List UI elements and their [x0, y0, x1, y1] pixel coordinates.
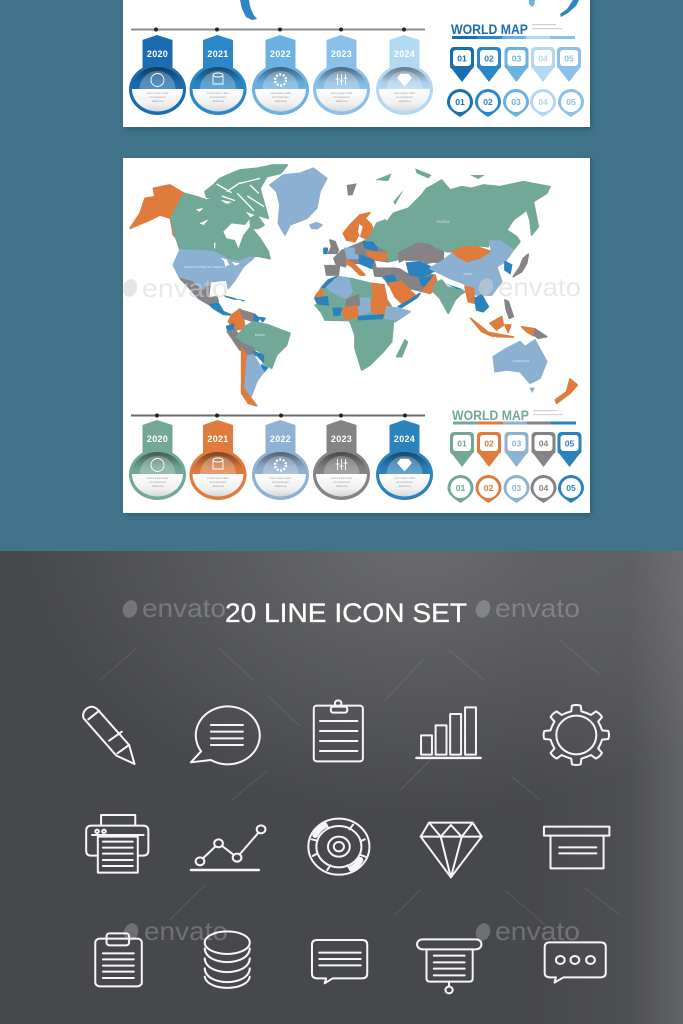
Mauritania — [328, 292, 345, 308]
badge 2022: 2022 — [270, 434, 291, 444]
Japan — [513, 254, 528, 277]
Alaska panhandle — [171, 220, 177, 238]
Alaska — [130, 185, 184, 228]
badge 2024: adipiscing — [399, 484, 411, 488]
China — [430, 241, 513, 295]
icon: clipboard — [314, 700, 363, 761]
Hudson Bay — [223, 219, 250, 248]
icon: diamond — [421, 823, 482, 877]
round pin 05: 05 — [566, 483, 576, 493]
Morocco — [322, 277, 337, 287]
badge 2022 — [252, 35, 309, 115]
badge 2024 — [376, 420, 433, 500]
Sweden gulf — [358, 224, 363, 237]
Scandinavia — [343, 213, 373, 242]
badge 2021: Lorem ipsum dolor — [207, 476, 229, 480]
badge 2022: Lorem ipsum dolor — [270, 91, 291, 95]
Russia — [370, 180, 550, 262]
icon: bar chart — [416, 707, 481, 758]
round pin 02: 02 — [484, 483, 493, 493]
label: Australia: AUSTRALIA — [513, 359, 529, 363]
label: Russia: RUSSIA — [436, 220, 450, 224]
round pin 03: 03 — [512, 483, 521, 493]
heading: world map: WORLD MAP — [452, 408, 529, 423]
Chile — [242, 348, 257, 406]
badge 2020 — [129, 420, 186, 500]
badge 2024: Lorem ipsum dolor — [394, 91, 415, 95]
square pin 04: 04 — [539, 438, 548, 448]
Black Sea — [375, 261, 390, 268]
legend: top card — [447, 22, 584, 117]
world map: Asia, southern Africa and Oceania — [347, 168, 577, 403]
badge 2023: sit consectetur — [333, 480, 350, 484]
title: 20 LINE ICON SET — [225, 598, 467, 628]
Ghana — [333, 308, 342, 315]
badge 2023: adipiscing — [336, 484, 348, 488]
label: Brazil: BRAZIL — [255, 333, 266, 337]
Caspian Sea — [398, 260, 408, 273]
timeline dots — [154, 28, 406, 32]
Australia — [493, 340, 547, 383]
Arctic channels — [217, 178, 264, 211]
Southern Africa — [350, 320, 393, 370]
label: USA: UNITED STATES OF AMERICA — [184, 265, 226, 269]
Kazakhstan east — [398, 243, 443, 263]
Yemen — [398, 293, 420, 307]
Ireland — [324, 248, 327, 253]
square pin 04: 04 — [538, 54, 548, 64]
square pin 02: 02 — [484, 438, 494, 448]
badge 2023: sit consectetur — [333, 95, 350, 99]
round pin 03: 03 — [511, 97, 521, 107]
Russia west — [363, 213, 443, 262]
watermark: map right: envato — [498, 272, 581, 302]
panel: icon set — [0, 551, 683, 1024]
badge 2022: adipiscing — [275, 99, 287, 103]
round pin 01: 01 — [455, 97, 465, 107]
badge 2022: Lorem ipsum dolor — [270, 476, 291, 480]
badge 2022: sit consectetur — [272, 480, 289, 484]
Saudi Arabia — [388, 282, 417, 303]
legend colour bar — [452, 36, 575, 39]
square pin 03: 03 — [512, 438, 521, 448]
round pin 04: 04 — [538, 97, 548, 107]
Algeria — [327, 277, 353, 298]
icon: printer — [86, 815, 148, 873]
New Zealand — [555, 379, 577, 403]
Greenland — [270, 168, 327, 235]
Western Sahara — [315, 288, 323, 297]
square pin 02: 02 — [484, 54, 494, 64]
India — [433, 280, 465, 313]
Nigeria — [343, 306, 358, 319]
Europe landmass — [334, 242, 388, 268]
Mexico — [181, 279, 218, 305]
panel: main map card — [123, 158, 592, 516]
legend note — [533, 410, 563, 415]
icon: speech bubble — [191, 706, 260, 764]
badge 2023: adipiscing — [336, 99, 348, 103]
Arctic archipelago — [205, 165, 287, 218]
Venezuela — [240, 310, 255, 322]
Myanmar — [465, 287, 475, 303]
country labels — [184, 220, 529, 363]
badge 2022: adipiscing — [275, 484, 287, 488]
timeline line — [131, 28, 425, 30]
badge 2020 — [129, 35, 186, 115]
Africa landmass — [315, 277, 410, 322]
heading: world map: WORLD MAP — [451, 22, 528, 37]
badge 2024: sit consectetur — [396, 95, 413, 99]
Papua — [534, 329, 547, 338]
badge 2021: adipiscing — [212, 484, 224, 488]
icons: middle row — [86, 815, 609, 877]
Bangladesh and Nepal — [445, 283, 465, 290]
map fragment: South America tip — [240, 0, 257, 20]
Iceland — [310, 223, 322, 229]
icons: bottom row — [95, 931, 606, 993]
Sudan and Egypt — [369, 283, 395, 318]
Mongolia — [452, 247, 492, 263]
Canadian lakes — [196, 208, 215, 248]
West Africa — [315, 305, 342, 317]
badge 2020: 2020 — [147, 49, 168, 59]
badge 2022: sit consectetur — [272, 95, 289, 99]
Iraq — [385, 275, 398, 285]
watermark: icon panel bottom right: envato — [495, 916, 580, 946]
Caribbean — [223, 295, 245, 302]
round pin 04: 04 — [539, 483, 548, 493]
square pin 05: 05 — [565, 438, 574, 448]
Iran — [395, 275, 423, 288]
label: China: CHINA — [463, 272, 473, 276]
badge 2021 — [190, 35, 246, 115]
Balkans — [359, 255, 373, 268]
badge 2020: adipiscing — [152, 99, 164, 103]
badge 2020: 2020 — [147, 434, 168, 444]
badge 2021 — [190, 420, 246, 500]
icon: coin stack — [205, 931, 250, 988]
badge 2023 — [313, 35, 370, 115]
round pin 02: 02 — [483, 97, 493, 107]
Svalbard — [347, 183, 357, 196]
badge 2020: Lorem ipsum dolor — [147, 476, 168, 480]
Argentina — [243, 355, 263, 403]
map fragment: New Zealand — [560, 0, 579, 17]
badge 2024: 2024 — [394, 434, 415, 444]
badge 2020: sit consectetur — [149, 480, 166, 484]
badge 2021: adipiscing — [212, 99, 224, 103]
Spain — [325, 266, 339, 275]
icon: presentation board — [417, 939, 481, 993]
badge 2022 — [252, 420, 309, 500]
Pakistan — [423, 275, 438, 293]
icon: message — [312, 940, 367, 983]
Philippines — [505, 300, 513, 318]
Niger — [345, 295, 359, 307]
Central Africa band — [359, 315, 383, 322]
Baltics — [363, 242, 377, 251]
USA — [173, 250, 253, 292]
icons: top row — [83, 700, 609, 765]
badge 2021: Lorem ipsum dolor — [207, 91, 229, 95]
Paraguay — [253, 352, 263, 362]
badge 2021: sit consectetur — [210, 95, 226, 99]
Colombia — [228, 309, 245, 330]
timeline dots — [155, 414, 407, 418]
Central Asia — [405, 262, 437, 277]
badge 2021: sit consectetur — [210, 480, 226, 484]
Indonesia — [471, 317, 535, 337]
Italy — [346, 260, 365, 275]
Germany — [345, 248, 360, 258]
badge 2021: 2021 — [207, 434, 229, 444]
Kamchatka — [527, 202, 538, 235]
Ethiopia — [385, 307, 410, 320]
Libya — [350, 278, 373, 298]
badge 2024: 2024 — [394, 49, 415, 59]
badge 2023: Lorem ipsum dolor — [331, 91, 352, 95]
icon: poker chip — [308, 819, 369, 875]
France — [334, 250, 347, 267]
Brazil — [237, 322, 290, 368]
icon: line chart — [191, 825, 265, 870]
badge 2022: 2022 — [270, 49, 291, 59]
badge 2023: 2023 — [331, 434, 352, 444]
icon: notepad — [95, 933, 142, 986]
round pin 01: 01 — [456, 483, 465, 493]
badge 2020: sit consectetur — [149, 95, 166, 99]
Red Sea — [385, 284, 397, 306]
Peru — [227, 330, 247, 352]
icon: archive box — [544, 827, 609, 868]
Madagascar — [397, 340, 407, 357]
badge 2024 — [376, 35, 433, 115]
Uruguay — [262, 365, 267, 372]
icon: chat dots — [545, 942, 606, 983]
badge 2021: 2021 — [207, 49, 229, 59]
Mali — [315, 297, 332, 305]
timeline: main card — [129, 414, 433, 500]
badge 2024: Lorem ipsum dolor — [394, 476, 415, 480]
Middle East landmass — [375, 268, 438, 292]
world map: Europe, Middle East and North Africa — [310, 213, 443, 322]
Bolivia — [242, 343, 257, 358]
Turkey — [373, 268, 395, 277]
Kazakhstan — [398, 243, 443, 263]
timeline: top card — [129, 28, 433, 115]
square pin 03: 03 — [512, 54, 521, 64]
Arctic islands — [375, 168, 485, 205]
Canada mainland — [171, 193, 270, 261]
map fragment: Tasmania — [529, 0, 535, 7]
square pin 01: 01 — [457, 54, 467, 64]
icon: pencil — [83, 707, 135, 764]
Ukraine — [367, 252, 388, 260]
square pin 01: 01 — [457, 438, 467, 448]
watermark: icon panel bottom left: envato — [144, 916, 228, 946]
Central America — [210, 303, 232, 315]
badge 2023: Lorem ipsum dolor — [331, 476, 352, 480]
Korea — [505, 262, 512, 273]
timeline line — [131, 414, 425, 416]
legend: main card — [448, 408, 584, 503]
legend note — [532, 24, 562, 29]
Poland — [356, 247, 367, 253]
Indochina — [475, 295, 488, 312]
Great Lakes — [221, 258, 240, 267]
legend colour bar — [453, 422, 576, 424]
watermark: icon panel top left: envato — [142, 593, 226, 623]
badge 2024: adipiscing — [399, 99, 411, 103]
badge 2020: adipiscing — [152, 484, 164, 488]
icon: gear — [544, 705, 609, 765]
watermark: icon panel top right: envato — [495, 593, 580, 623]
panel: top map card — [123, 0, 592, 130]
world map: North America north — [130, 165, 327, 406]
Guyanas — [254, 315, 265, 322]
square pin 05: 05 — [564, 54, 574, 64]
Chad — [357, 298, 370, 315]
badge 2024: sit consectetur — [396, 480, 413, 484]
Ecuador — [227, 324, 233, 332]
badge 2023 — [313, 420, 370, 500]
Tasmania — [529, 388, 535, 393]
Afghanistan — [420, 277, 433, 287]
United Kingdom — [328, 240, 338, 253]
round pin 05: 05 — [566, 97, 576, 107]
badge 2023: 2023 — [331, 49, 352, 59]
teal background — [0, 0, 683, 552]
badge 2020: Lorem ipsum dolor — [147, 91, 168, 95]
watermark: map left: envato — [142, 273, 228, 303]
